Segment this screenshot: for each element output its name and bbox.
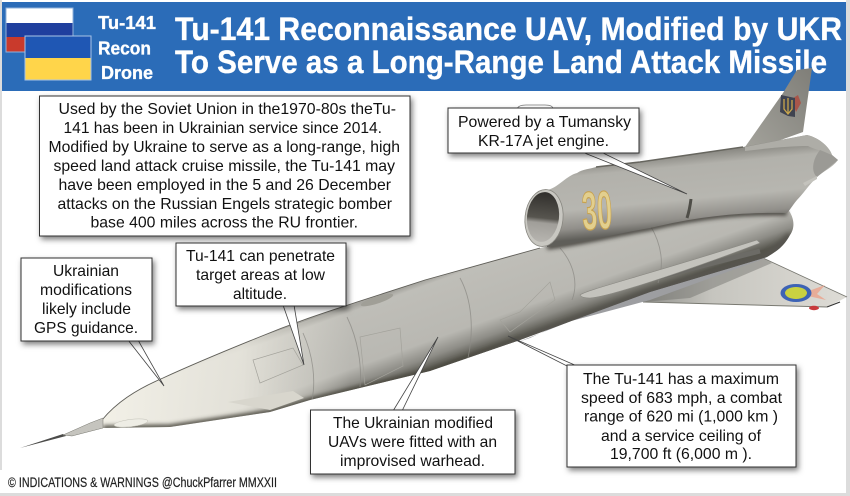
engine intake: [522, 188, 566, 248]
drone label: Recon: [98, 38, 151, 58]
callout: warhead: improvised warhead.: [340, 453, 485, 470]
title: [175, 11, 842, 80]
callout: performance: range of 620 mi (1,000 km ): [584, 408, 778, 426]
callout: GPS guidance: likely include: [42, 301, 131, 318]
callout: engine: Powered by a Tumansky: [458, 114, 631, 131]
callout: service history: speed land attack cruise missile, the Tu-141 may: [54, 158, 395, 175]
callout: low altitude penetration: target areas at low: [196, 267, 325, 284]
icon: Ukrainian flag: [25, 36, 91, 80]
dorsal bump: [360, 291, 394, 309]
callout: service history: have been employed in the 5 and 26 December: [58, 177, 392, 194]
header banner: [2, 2, 846, 91]
callout: warhead: [310, 337, 515, 474]
icon: fin emblem: [780, 95, 801, 117]
drone illustration: [20, 68, 847, 448]
callout: low altitude penetration: altitude.: [233, 286, 287, 303]
nose pod: [114, 417, 148, 429]
callout: performance: speed of 683 mph, a combat: [581, 390, 783, 407]
callout: service history: Modified by Ukraine to serve as a long-range, high: [48, 139, 400, 156]
tail fin: [745, 68, 812, 147]
callout: performance: The Tu-141 has a maximum: [583, 371, 779, 388]
callout: service history: attacks on the Russian Engels strategic bomber: [58, 196, 393, 213]
callout: service history: base 400 miles across the RU frontier.: [90, 214, 358, 232]
fuselage: [102, 208, 793, 428]
drone label: Drone: [101, 62, 153, 83]
ventral strake: [518, 257, 767, 342]
nose probe: [20, 418, 103, 448]
drone label: Tu-141: [98, 12, 156, 33]
tab behind engine callout: [517, 105, 553, 109]
callout: GPS guidance: GPS guidance.: [34, 320, 138, 337]
drone label: [98, 12, 156, 83]
callout: performance: 19,700 ft (6,000 m ).: [610, 446, 752, 463]
callout: warhead: UAVs were fitted with an: [328, 434, 497, 451]
wing: [643, 258, 847, 310]
callout: GPS guidance: modifications: [40, 282, 132, 299]
callout: service history: [40, 96, 410, 236]
callout: service history: 141 has been in Ukrainian service since 2014.: [64, 120, 382, 137]
callout: GPS guidance: Ukrainian: [53, 263, 119, 280]
fuselage rail: [580, 240, 760, 298]
callout: warhead: The Ukrainian modified: [333, 415, 493, 432]
icon: Russian flag: [6, 8, 73, 52]
callout: GPS guidance: [21, 258, 164, 386]
callout: performance: [508, 336, 796, 467]
fuselage number 30: 30: [581, 180, 614, 242]
ventral fin: [228, 391, 304, 410]
callout: engine: KR-17A jet engine.: [478, 133, 609, 150]
callout: service history: Used by the Soviet Union in the1970-80s theTu-: [58, 101, 396, 118]
engine nacelle: [522, 135, 838, 248]
callout: engine: [448, 108, 687, 194]
footer credit: © INDICATIONS & WARNINGS @ChuckPfarrer MMXXII: [8, 475, 277, 490]
wing roundel: [780, 284, 826, 310]
callout: low altitude penetration: Tu-141 can penetrate: [186, 248, 335, 265]
callout: performance: and a service ceiling of: [601, 428, 762, 445]
callout: low altitude penetration: [176, 243, 346, 365]
